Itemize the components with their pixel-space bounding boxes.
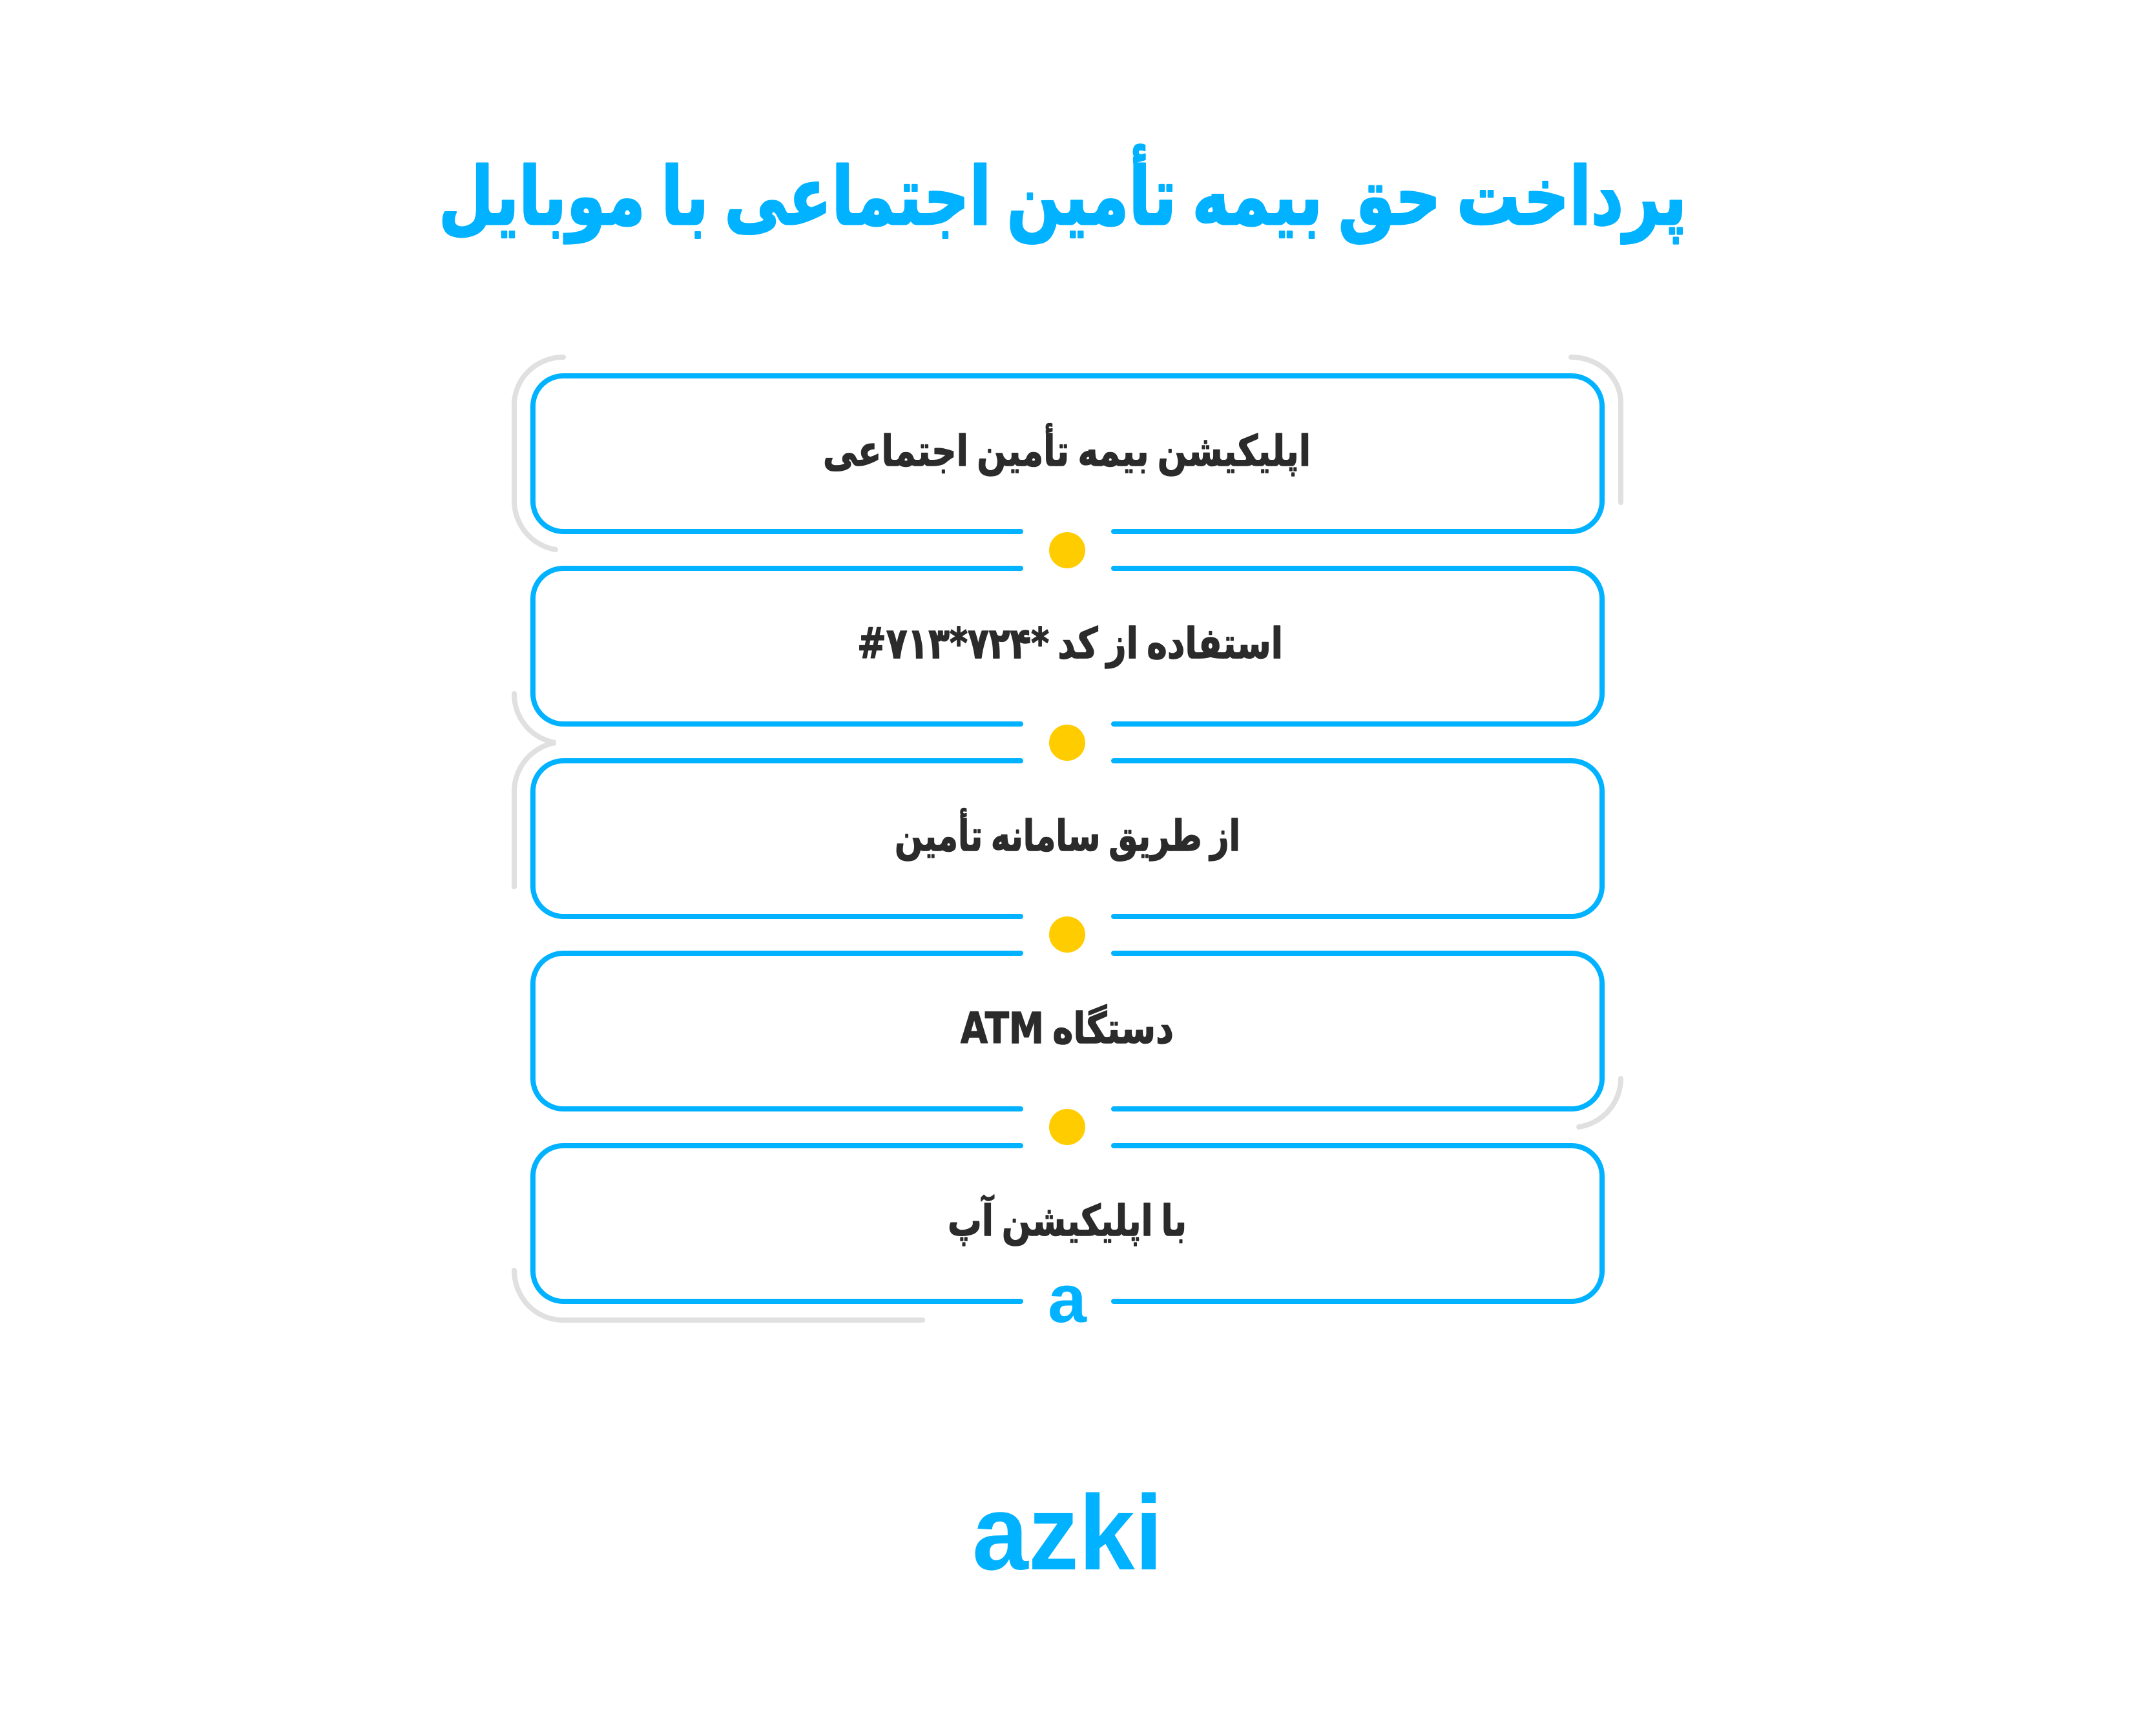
- option 2 label: استفاده از کد *۷۲۴*۷۱۳#: [857, 619, 1283, 668]
- panel: option 5: [533, 1146, 1602, 1301]
- panel: option 1: [533, 376, 1602, 532]
- option 3 label: از طریق سامانه تأمین: [895, 808, 1240, 862]
- panel: option 3: [533, 761, 1602, 916]
- title: پرداخت حق بیمه تأمین اجتماعی با موبایل: [439, 145, 1687, 244]
- logo: azki: azki: [972, 1473, 1163, 1592]
- connector dot 4: [1049, 1109, 1085, 1145]
- option 4 label: دستگاه ATM: [961, 1004, 1174, 1053]
- option 5 label: با اپلیکیشن آپ: [948, 1194, 1187, 1246]
- connector dot 1: [1049, 532, 1085, 568]
- decorative grey bracket outline: [514, 357, 1621, 1320]
- icon: small logo letter a: a: [1048, 1261, 1088, 1337]
- connector dot 2: [1049, 725, 1085, 761]
- connector dot 3: [1049, 916, 1085, 953]
- panel: option 4: [533, 953, 1602, 1109]
- option 1 label: اپلیکیشن بیمه تأمین اجتماعی: [823, 423, 1311, 476]
- panel: option 2: [533, 568, 1602, 724]
